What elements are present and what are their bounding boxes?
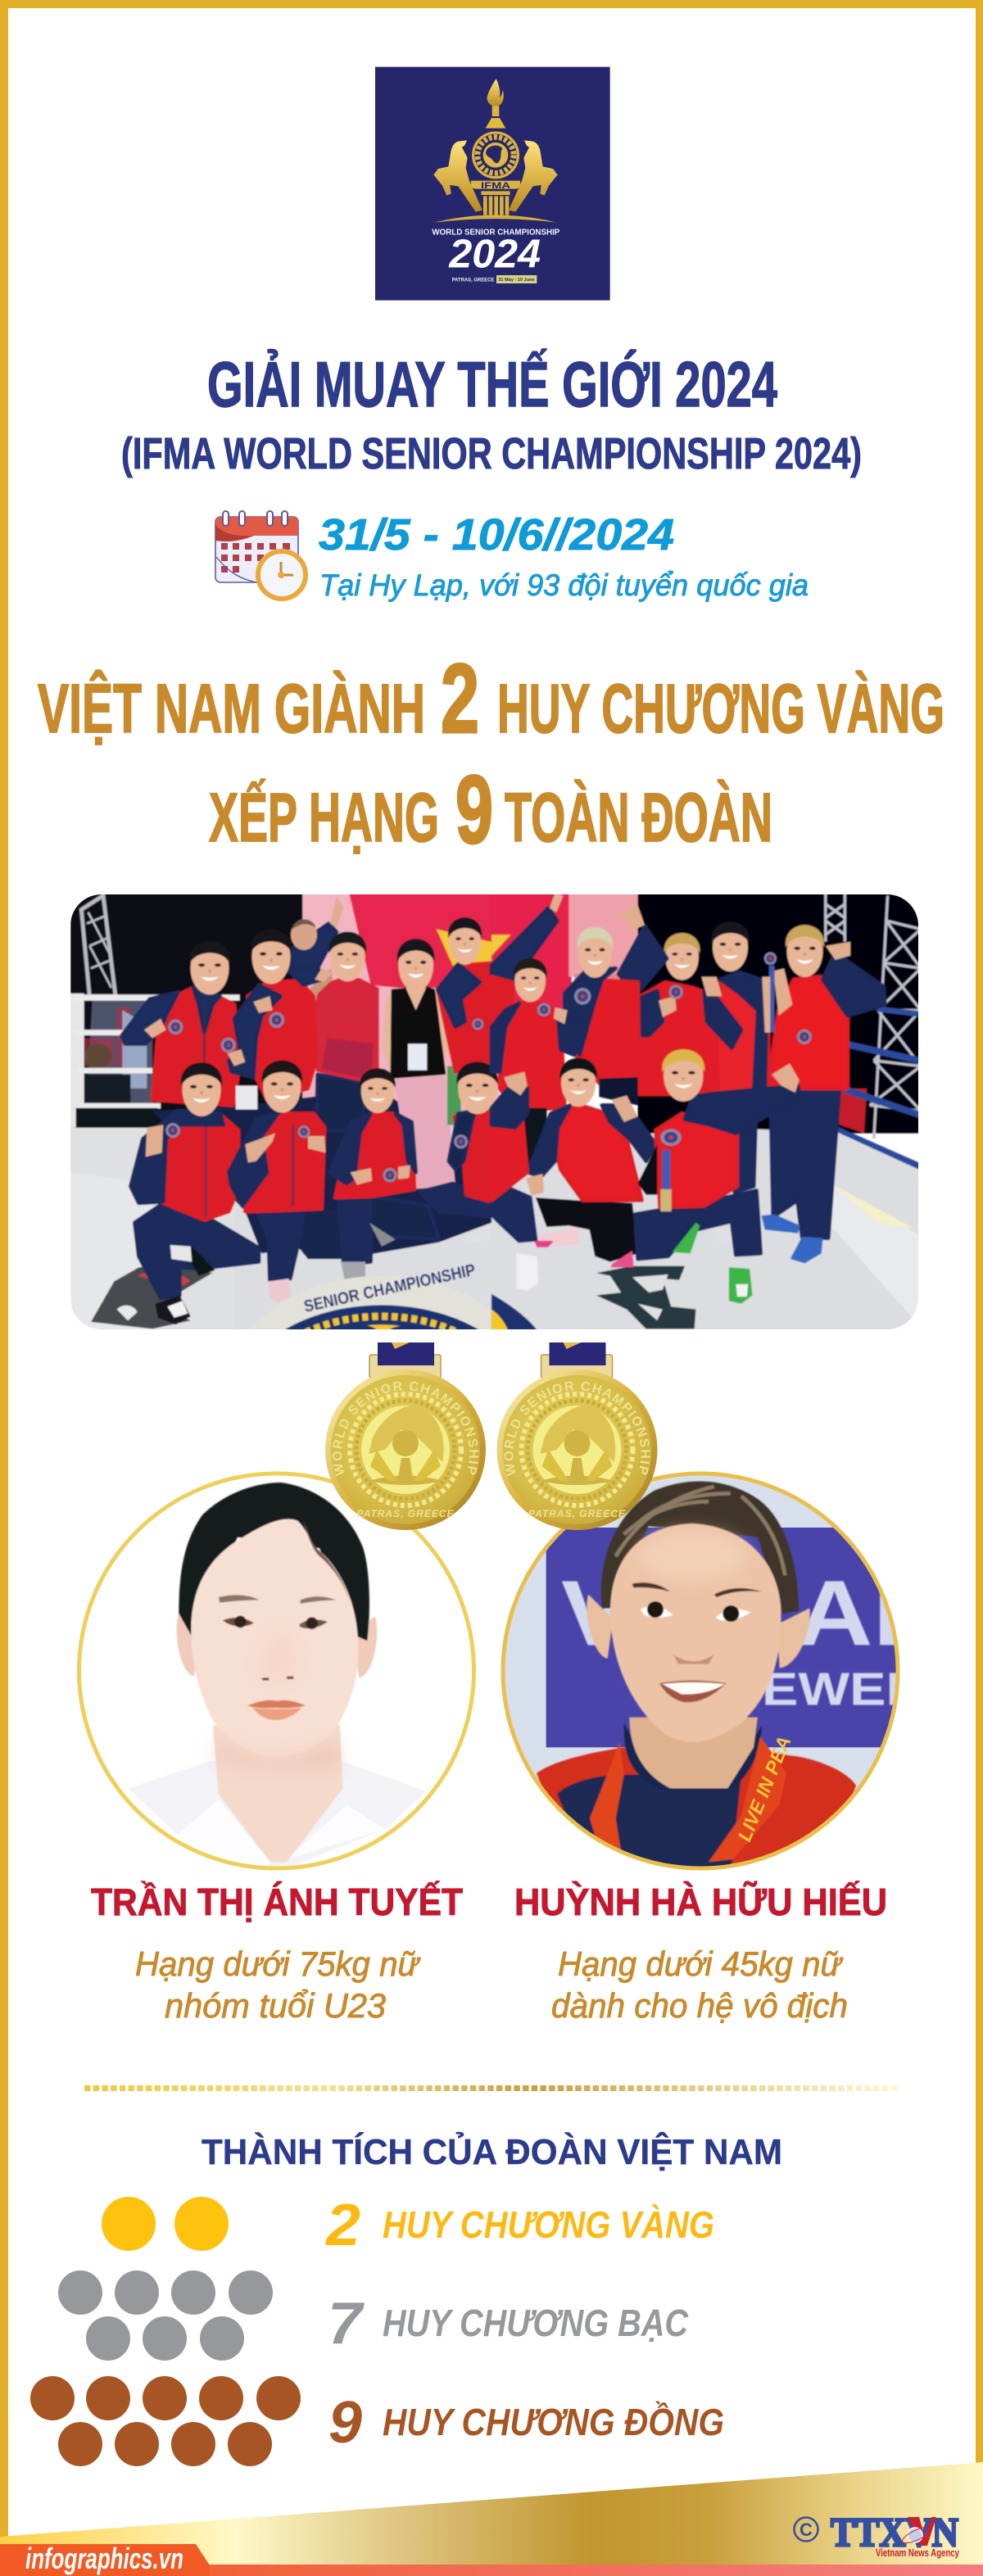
- logo: IFMA World Senior Championship 2024: WORLD SENIOR CHAMPIONSHIP: [432, 229, 560, 238]
- footer band: [0, 2462, 983, 2576]
- portrait ring: Huỳnh Hà Hữu Hiếu: [503, 1474, 898, 1868]
- gold medal 2: PATRAS, GREECE: [528, 1508, 626, 1519]
- footer site name: infographics.vn: [25, 2542, 183, 2575]
- logo: IFMA World Senior Championship 2024: [375, 67, 610, 301]
- athlete 1 name and category: Hạng dưới 75kg nữ: [135, 1944, 421, 1983]
- headline: 2 gold medals: 2: [441, 644, 479, 754]
- front row: athlete 4, left part: [420, 1184, 496, 1217]
- portrait: Trần Thị Ánh Tuyết: [129, 1481, 424, 1866]
- headline: ranked 9th: [209, 756, 772, 864]
- man: second back row: [245, 981, 316, 1100]
- athlete 2 name and category: Hạng dưới 45kg nữ: [558, 1944, 844, 1983]
- gold medal 1: WORLD SENIOR CHAMPIONSHIP 2024: [333, 1381, 478, 1476]
- portrait ring: Trần Thị Ánh Tuyết: [79, 1474, 473, 1868]
- gold medal 1: PATRAS, GREECE: [357, 1508, 454, 1519]
- mat logo left: [91, 1265, 212, 1329]
- man raising arm (left part): [437, 962, 496, 1071]
- woman: black top: [382, 988, 453, 1071]
- athlete 2 name and category: HUỲNH HÀ HỮU HIẾU: [514, 1881, 887, 1923]
- athlete 2 name and category: dành cho hệ vô địch: [551, 1986, 848, 2025]
- bronze medal dots: [30, 2376, 301, 2466]
- headline: ranked 9th: XẾP HẠNG: [209, 779, 439, 856]
- gold medal count: [324, 2193, 714, 2258]
- gold medal count: HUY CHƯƠNG VÀNG: [383, 2203, 714, 2246]
- TTXVN logo: [795, 2509, 960, 2559]
- silver medal dots: [58, 2270, 273, 2361]
- bronze medal count: HUY CHƯƠNG ĐỒNG: [383, 2401, 724, 2443]
- date and location: [319, 510, 809, 602]
- gold medal 2: [496, 1342, 657, 1530]
- man: left, back row: [152, 988, 240, 1105]
- silver medal count: [328, 2291, 689, 2356]
- portrait: Huỳnh Hà Hữu Hiếu: LIVE IN PEA: [734, 1733, 795, 1845]
- photo left half: [70, 894, 501, 1329]
- portrait: Huỳnh Hà Hữu Hiếu: [496, 1466, 907, 1876]
- back row 4 far right: [770, 1089, 840, 1238]
- portrait: Huỳnh Hà Hữu Hiếu: EWEI: [762, 1664, 901, 1716]
- photo right half: [492, 893, 925, 1332]
- TTXVN logo: TTXVN: [831, 2509, 958, 2555]
- legs mass behind front row: [152, 1089, 499, 1259]
- front row: athlete 3: [338, 1186, 372, 1265]
- coach: red t-shirt and tattoo arm: [316, 1075, 368, 1130]
- date and location: 31/5 - 10/6//2024: [319, 510, 674, 559]
- logo: IFMA World Senior Championship 2024: PATRAS, GREECE: [452, 278, 494, 283]
- front row: athlete 4 right part: [492, 1184, 536, 1241]
- back row: athlete with long hair: [500, 1003, 564, 1110]
- portrait: Huỳnh Hà Hữu Hiếu: AI: [796, 1561, 903, 1665]
- headline: 2 gold medals: [38, 644, 944, 754]
- silver medal count: HUY CHƯƠNG BẠC: [383, 2302, 689, 2344]
- headline: ranked 9th: TOÀN ĐOÀN: [505, 779, 772, 856]
- back row: man with blond hair: [574, 980, 639, 1083]
- mat logo right: [596, 1266, 695, 1329]
- front row: athlete 2: [300, 1248, 342, 1260]
- athlete 2 name and category: [514, 1881, 887, 2025]
- gold medal count: 2: [324, 2193, 360, 2258]
- athlete 1 name and category: TRẦN THỊ ÁNH TUYẾT: [91, 1881, 463, 1923]
- bronze medal count: [328, 2390, 724, 2456]
- title: GIẢI MUAY THẾ GIỚI 2024: [207, 348, 777, 420]
- gold medal 2: WORLD SENIOR CHAMPIONSHIP 2024: [504, 1381, 650, 1476]
- icon: calendar and clock: [215, 511, 306, 599]
- headline: 2 gold medals: VIỆT NAM GIÀNH: [38, 670, 425, 747]
- raised flag arm and hand: [492, 908, 557, 985]
- title: [121, 348, 862, 478]
- front row: athlete 1: [134, 1203, 259, 1298]
- person behind: arm raised: [290, 924, 337, 971]
- photo left half: SENIOR CHAMPIONSHIP: [302, 1261, 477, 1316]
- athlete 1 name and category: [91, 1881, 463, 2025]
- gold medal dots: [102, 2197, 229, 2251]
- logo: IFMA World Senior Championship 2024: 31 May - 10 June: [498, 278, 535, 283]
- headline: ranked 9th: 9: [455, 756, 493, 864]
- gold medal 1: [325, 1342, 486, 1530]
- bronze medal count: 9: [328, 2390, 362, 2456]
- date and location: Tại Hy Lạp, với 93 đội tuyển quốc gia: [319, 568, 809, 602]
- logo: IFMA World Senior Championship 2024: 2024: [448, 232, 541, 277]
- front row: blond athlete: [635, 1190, 761, 1259]
- results heading: THÀNH TÍCH CỦA ĐOÀN VIỆT NAM: [202, 2130, 782, 2172]
- silver medal count: 7: [328, 2291, 365, 2356]
- championship mat emblem: [344, 1276, 367, 1288]
- front row: black trousers athlete: [536, 1197, 638, 1262]
- athlete 1 name and category: nhóm tuổi U23: [165, 1986, 386, 2025]
- TTXVN logo: C: [800, 2519, 813, 2540]
- team photo: [70, 894, 918, 1329]
- portrait: Huỳnh Hà Hữu Hiếu: V: [561, 1561, 629, 1665]
- logo: IFMA World Senior Championship 2024: IFMA: [481, 181, 510, 191]
- back row: woman with medal: [638, 982, 718, 1094]
- back row: short hair woman: [718, 976, 772, 1093]
